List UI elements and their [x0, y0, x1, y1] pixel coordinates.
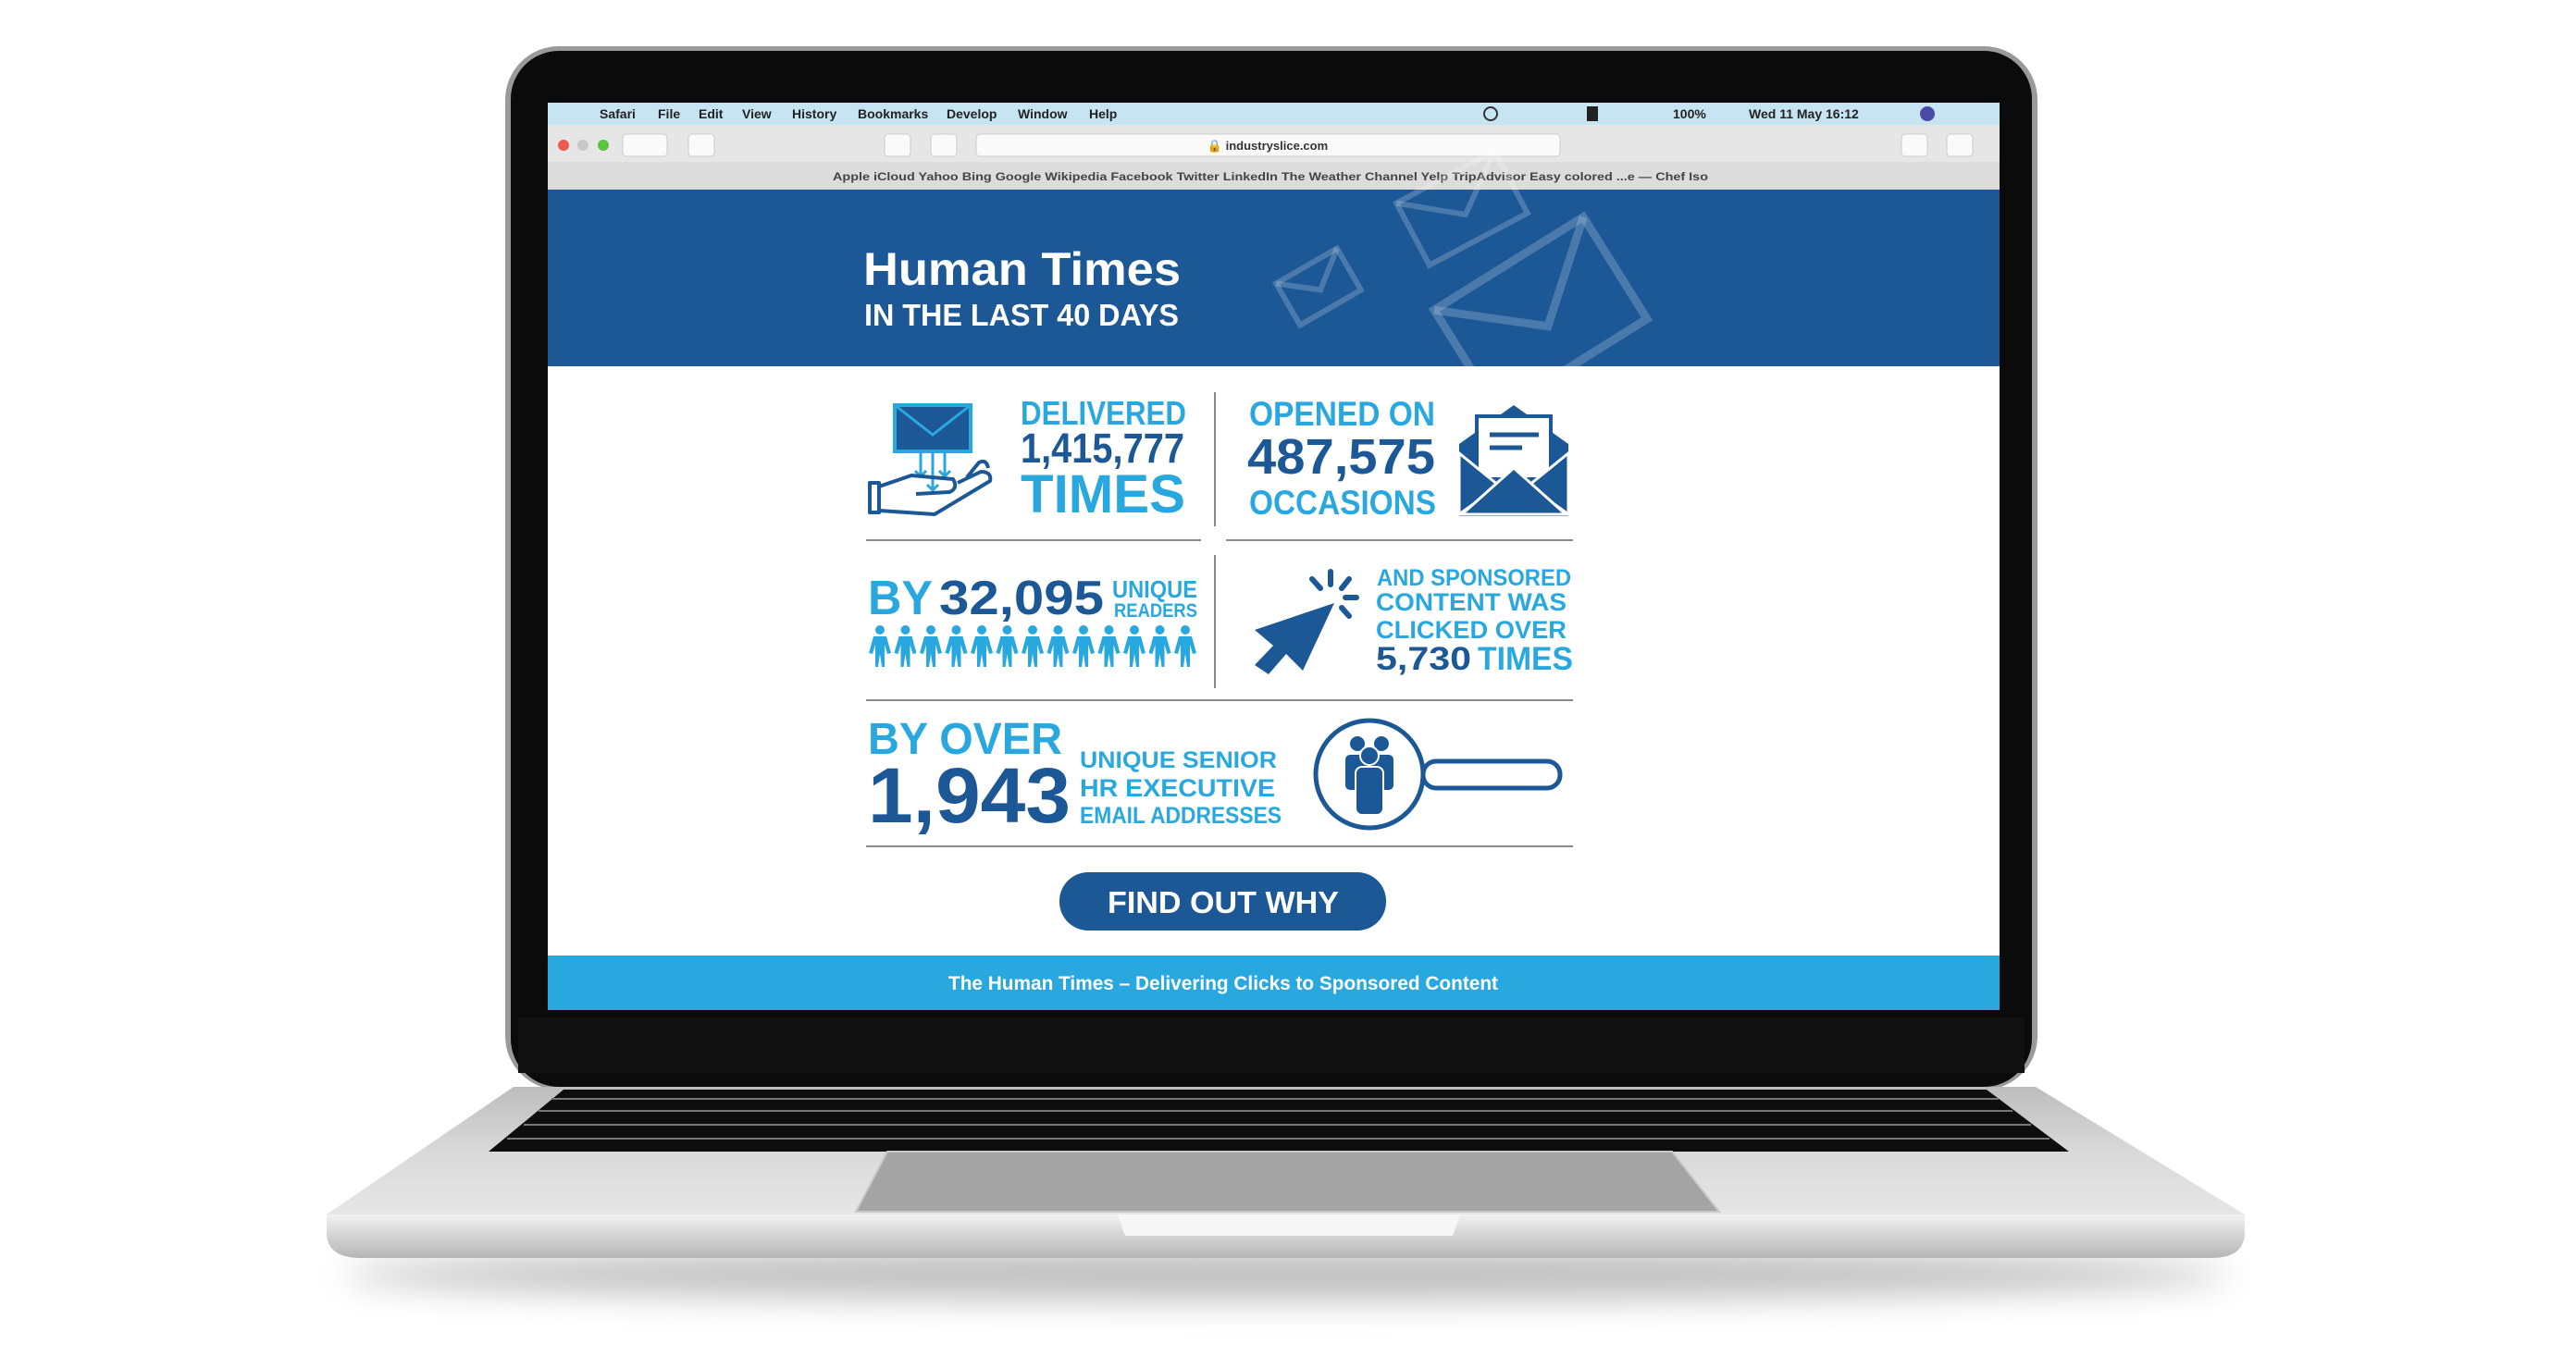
panel: sponsored clicks: TIMES: [1478, 641, 1573, 677]
panel: opened: OCCASIONS: [1249, 484, 1436, 522]
menu bar: Develop: [947, 106, 997, 121]
panel: delivered: 1,415,777: [1021, 425, 1184, 472]
button: find out why: FIND OUT WHY: [1108, 885, 1339, 919]
footer bar: The Human Times – Delivering Clicks to Sponsored Content: [948, 973, 1498, 994]
menu bar: Window: [1018, 106, 1068, 121]
subtitle: IN THE LAST 40 DAYS: [864, 298, 1179, 332]
icon: cursor: [1255, 572, 1356, 674]
panel: delivered: [870, 394, 1186, 524]
menu bar: 100%: [1673, 106, 1706, 121]
menu bar: Safari: [600, 106, 636, 121]
icon: row of people: [869, 625, 1196, 667]
bookmarks bar: Apple iCloud Yahoo Bing Google Wikipedia Facebook Twitter LinkedIn The Weather Channel Yelp TripAdvisor Easy colored ...e — Chef Iso: [833, 170, 1708, 183]
icon: envelope in hand: [870, 405, 990, 514]
laptop shadow: [342, 1249, 2230, 1301]
laptop base: [327, 1087, 2245, 1258]
panel: unique readers: BY: [868, 572, 933, 625]
decorative envelopes: [1276, 151, 1647, 412]
panel: sponsored clicks: CONTENT WAS: [1376, 588, 1567, 616]
icon: magnifier with people: [1316, 721, 1560, 828]
panel: opened: [1247, 395, 1568, 522]
panel: unique readers: [868, 572, 1197, 667]
panel: opened: OPENED ON: [1249, 395, 1435, 433]
menu bar: View: [742, 106, 772, 121]
menu bar: File: [658, 106, 680, 121]
screen: [548, 103, 2000, 1010]
panel: delivered: TIMES: [1021, 464, 1185, 524]
menu bar: Help: [1089, 106, 1117, 121]
panel: senior hr executives: UNIQUE SENIOR: [1080, 747, 1277, 773]
icon: open envelope: [1459, 405, 1568, 516]
menu bar: Wed 11 May 16:12: [1749, 106, 1859, 121]
panel: senior hr executives: BY OVER: [868, 715, 1062, 764]
panel: opened: 487,575: [1247, 429, 1435, 485]
footer bar: [548, 955, 2000, 1010]
panel: unique readers: 32,095: [939, 572, 1104, 625]
menu bar: History: [792, 106, 836, 121]
trackpad: [856, 1152, 1719, 1212]
header banner: [548, 151, 2000, 412]
panel: senior hr executives: EMAIL ADDRESSES: [1080, 803, 1282, 829]
laptop lid: [505, 46, 2037, 1090]
title: Human Times: [863, 243, 1181, 295]
toolbar: [548, 125, 2000, 162]
menu bar: [548, 103, 2000, 125]
panel: sponsored clicks: 5,730: [1376, 641, 1471, 677]
keyboard: [489, 1090, 2069, 1152]
button: find out why: [1059, 872, 1386, 931]
text: delivered: DELIVERED: [1021, 394, 1186, 432]
panel: sponsored clicks: [1255, 565, 1573, 677]
panel: senior hr executives: HR EXECUTIVE: [1080, 774, 1275, 802]
menu bar: Bookmarks: [858, 106, 928, 121]
panel: sponsored clicks: AND SPONSORED: [1377, 565, 1571, 591]
menu bar: Edit: [699, 106, 724, 121]
bookmarks bar: [548, 162, 2000, 190]
panel: unique readers: READERS: [1114, 600, 1197, 622]
panel: senior hr executives: 1,943: [868, 752, 1071, 839]
panel: unique readers: UNIQUE: [1112, 575, 1197, 603]
panel: sponsored clicks: CLICKED OVER: [1376, 616, 1567, 644]
toolbar: 🔒 industryslice.com: [1208, 139, 1328, 153]
panel: senior hr executives: [868, 715, 1560, 839]
